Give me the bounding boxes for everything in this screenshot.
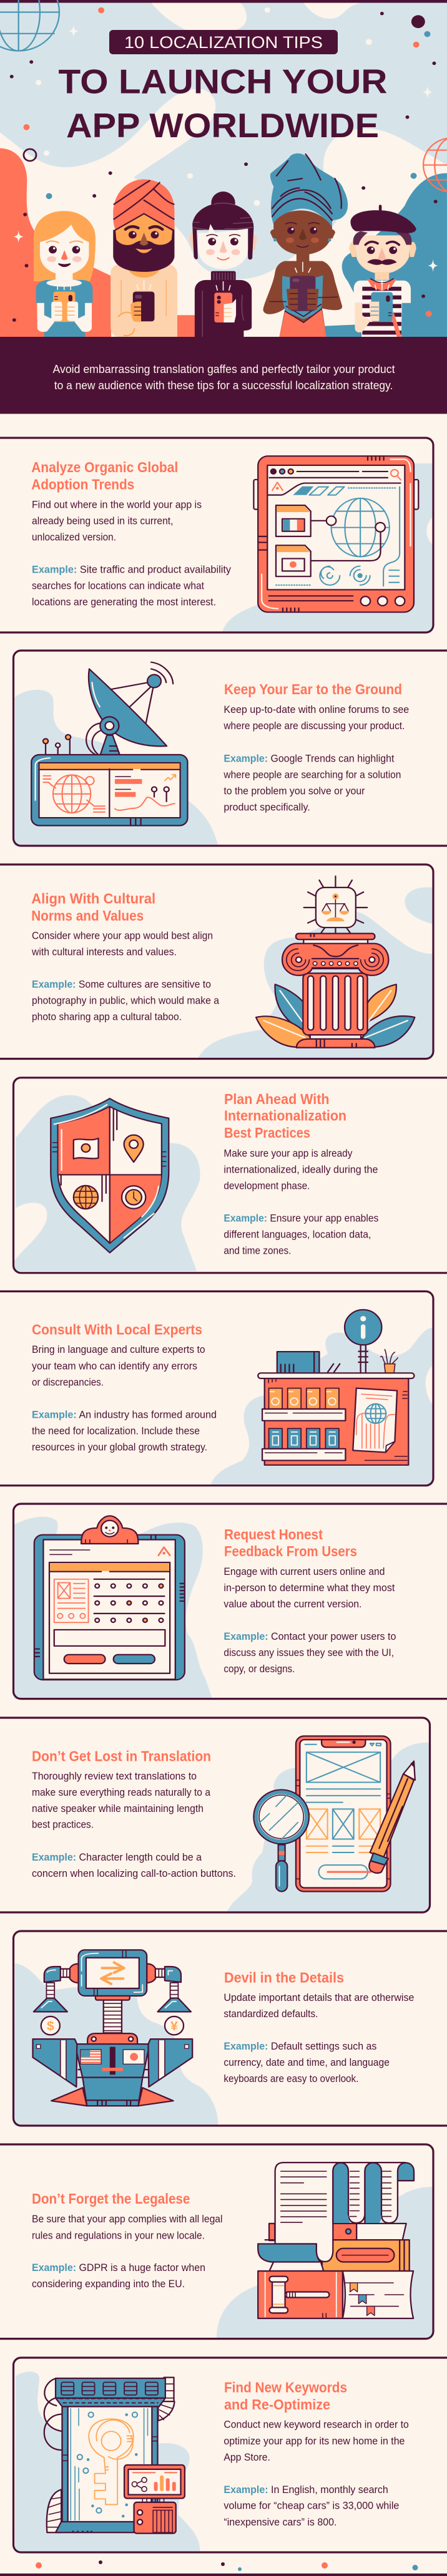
heading: Align With Cultural — [31, 891, 155, 907]
heading — [31, 459, 178, 493]
person: man with turban — [111, 180, 177, 337]
body text: already being used in its current, — [32, 515, 174, 526]
body text: unlocalized version. — [32, 531, 116, 543]
body text — [224, 1992, 414, 2085]
body text: Example: Some cultures are sensitive to — [32, 978, 211, 990]
panel 1: analyze organic global adoption trends — [0, 438, 433, 632]
icon: magnifying glass — [253, 1790, 309, 1891]
body text: Example: Default settings such as — [224, 2040, 376, 2052]
body text — [224, 2419, 409, 2528]
body text: Be sure that your app complies with all legal — [32, 2213, 222, 2225]
body text: Example: Contact your power users to — [224, 1630, 396, 1642]
body text: value about the current version. — [224, 1598, 361, 1610]
illustration: column with scales — [198, 876, 433, 1058]
heading: Don’t Get Lost in Translation — [32, 1748, 211, 1765]
heading: Consult With Local Experts — [32, 1321, 202, 1337]
person: woman with teal head wrap — [263, 153, 348, 337]
body text: to the problem you solve or your — [224, 785, 365, 797]
body text: the need for localization. Include these — [32, 1425, 200, 1436]
body text: Example: Character length could be a — [32, 1851, 202, 1863]
body text — [32, 498, 232, 608]
body text: volume for “cheap cars” is 33,000 while — [224, 2500, 399, 2512]
body text: Update important details that are otherwise — [224, 1992, 414, 2003]
heading — [224, 1091, 346, 1141]
illustration: tablet with globe — [222, 456, 433, 632]
decorative globes and dots — [0, 0, 447, 322]
heading: Keep Your Ear to the Ground — [224, 681, 402, 697]
body text: Bring in language and culture experts to — [32, 1344, 205, 1355]
intro band: to a new audience with these tips for a successful localization strategy. — [54, 379, 393, 392]
body text: where people are searching for a solution — [223, 768, 401, 780]
heading — [224, 1526, 357, 1559]
body text: native speaker while maintaining length — [32, 1803, 204, 1814]
label pill: 10 localization tips — [109, 30, 338, 54]
intro band — [0, 337, 447, 414]
body text: make sure everything reads naturally to a — [32, 1786, 211, 1798]
panel 4: plan ahead with internationalization best practices — [14, 1078, 447, 1273]
illustration: translation robot: ¥ — [170, 2019, 178, 2033]
footer dots and border — [0, 2560, 447, 2576]
body text: or discrepancies. — [32, 1376, 104, 1388]
heading: Internationalization — [224, 1108, 346, 1124]
body text: Example: An industry has formed around — [32, 1408, 217, 1420]
intro band: Avoid embarrassing translation gaffes and perfectly tailor your product — [52, 362, 395, 375]
person: woman with dark bob — [190, 191, 257, 337]
heading: Request Honest — [224, 1526, 323, 1542]
body text: concern when localizing call-to-action buttons. — [32, 1867, 236, 1879]
body text: standardized defaults. — [224, 2008, 318, 2020]
body text: considering expanding into the EU. — [32, 2278, 185, 2290]
illustration: shield with four icons — [14, 1095, 200, 1271]
person: blonde woman — [34, 211, 96, 337]
header illustration background — [0, 2, 447, 337]
panel 9: don't forget the legalese — [0, 2144, 433, 2339]
top border bar — [0, 0, 447, 2]
body text — [31, 929, 220, 1022]
body text: locations are generating the most interest. — [32, 596, 216, 608]
body text: Make sure your app is already — [224, 1147, 353, 1159]
panel 7: don't get lost in translation — [0, 1718, 430, 1912]
body text: resources in your global growth strategy. — [32, 1441, 207, 1453]
body text: rules and regulations in your new locale. — [32, 2229, 205, 2241]
heading: Find New Keywords — [224, 2380, 347, 2396]
body text: Keep up-to-date with online forums to see — [224, 704, 409, 715]
heading: Don’t Forget the Legalese — [32, 2191, 190, 2207]
icon: teal globe — [0, 0, 59, 51]
body text: currency, date and time, and language — [224, 2056, 390, 2068]
icon: pencil — [369, 1761, 415, 1873]
illustration: satellite dish and monitor — [14, 662, 218, 846]
body text: Example: Ensure your app enables — [224, 1213, 378, 1224]
panel 6: request honest feedback from users — [14, 1504, 447, 1699]
illustration: translation robot: $ — [47, 2019, 54, 2033]
heading — [224, 2380, 347, 2413]
body text: Example: In English, monthly search — [224, 2484, 388, 2496]
panel 5: consult with local experts — [0, 1291, 433, 1486]
illustration: information desk — [210, 1310, 433, 1484]
body text: with cultural interests and values. — [31, 946, 177, 957]
title: TO LAUNCH YOUR — [59, 62, 387, 101]
body text: copy, or designs. — [224, 1663, 295, 1675]
title: APP WORLDWIDE — [66, 106, 379, 145]
illustration: feedback clipboard — [14, 1516, 212, 1699]
body text: searches for locations can indicate what — [32, 580, 204, 592]
body text — [32, 2213, 222, 2290]
heading: Adoption Trends — [31, 477, 134, 493]
scattered dots — [10, 7, 438, 322]
label pill: 10 localization tips: 10 LOCALIZATION TIPS — [124, 33, 323, 52]
body text: “inexpensive cars” is 800. — [224, 2516, 336, 2528]
person: man with beret — [349, 205, 416, 337]
panel 3: align with cultural norms and values — [0, 864, 433, 1059]
body text — [32, 1770, 236, 1879]
illustration: translation robot — [14, 1950, 218, 2125]
illustration: phone wireframe, magnifier and pencil — [227, 1736, 429, 1912]
body text: in-person to determine what they most — [224, 1582, 395, 1594]
body text: different languages, location data, — [224, 1229, 371, 1240]
heading: Devil in the Details — [224, 1970, 344, 1986]
heading: Norms and Values — [31, 908, 144, 924]
body text: Thoroughly review text translations to — [32, 1770, 197, 1782]
panel 10: find new keywords and re-optimize — [14, 2358, 447, 2552]
icon: coral globe — [423, 138, 447, 192]
body text — [224, 1147, 378, 1257]
body text: your team who can identify any errors — [32, 1360, 197, 1372]
body text — [223, 704, 409, 813]
body text: Conduct new keyword research in order to — [224, 2419, 409, 2431]
body text: where people are discussing your product. — [223, 720, 405, 732]
heading: Plan Ahead With — [224, 1091, 330, 1107]
panel 8: devil in the details — [14, 1931, 447, 2126]
body text: Consider where your app would best align — [32, 929, 213, 941]
heading — [31, 891, 155, 924]
body text — [224, 1566, 396, 1675]
body text: Example: Site traffic and product availability — [32, 564, 232, 575]
body text: photo sharing app a cultural taboo. — [32, 1010, 182, 1022]
body text: photography in public, which would make a — [32, 994, 220, 1006]
heading: Best Practices — [224, 1125, 310, 1141]
title — [59, 62, 387, 145]
body text: development phase. — [224, 1180, 310, 1191]
body text: keyboards are easy to overlook. — [224, 2073, 358, 2085]
heading: and Re-Optimize — [224, 2396, 330, 2413]
body text: Find out where in the world your app is — [32, 498, 202, 510]
body text: App Store. — [224, 2451, 270, 2463]
body text — [32, 1344, 217, 1453]
illustration: law books and scroll — [217, 2162, 433, 2338]
panel 2: keep your ear to the ground — [14, 651, 447, 846]
heading: Analyze Organic Global — [31, 459, 178, 475]
body text: and time zones. — [224, 1245, 291, 1257]
heading: Feedback From Users — [224, 1543, 357, 1559]
body text: Example: Google Trends can highlight — [224, 752, 395, 764]
body text: Example: GDPR is a huge factor when — [32, 2262, 205, 2273]
body text: best practices. — [32, 1819, 94, 1831]
body text: internationalized, ideally during the — [224, 1163, 378, 1175]
body text: Engage with current users online and — [224, 1566, 385, 1577]
body text: product specifically. — [224, 801, 310, 813]
five people holding phones — [34, 153, 416, 337]
body text: discuss any issues they see with the UI, — [224, 1647, 394, 1658]
body text: optimize your app for its new home in the — [224, 2435, 405, 2447]
illustration: key machine with analytics screen — [15, 2371, 200, 2551]
